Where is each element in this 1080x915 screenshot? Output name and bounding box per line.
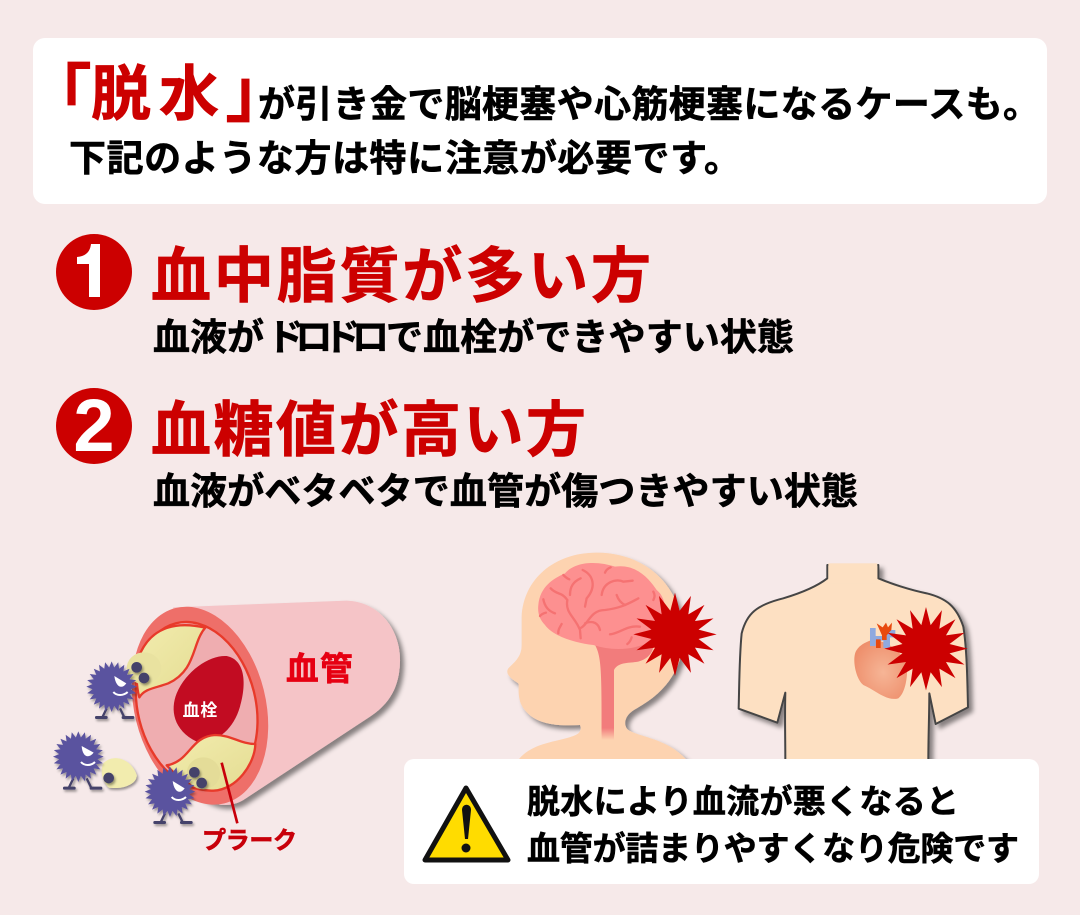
head silhouette	[507, 553, 687, 760]
pointer line	[222, 763, 237, 823]
text: intro line 1: が引き金で脳梗塞や心筋梗塞になるケースも。	[258, 84, 1040, 125]
heart vessels	[870, 623, 895, 648]
brain stem	[595, 640, 654, 740]
label: vessel: 血管	[286, 650, 353, 687]
text: item 2 description: 血液がベタベタで血管が傷つきやすい状態	[153, 471, 858, 512]
vessel wall	[112, 592, 288, 819]
text: item 1 description: で血栓ができやすい状態	[386, 317, 794, 358]
plaque: grabbed lower lump	[187, 757, 220, 789]
heading: dehydration highlight	[24, 55, 293, 135]
panel: warning callout	[404, 759, 1039, 884]
text: intro line 2: 下記のような方は特に注意が必要です。	[69, 138, 741, 179]
germ 3	[145, 766, 207, 824]
heading: dehydration highlight: 」	[225, 55, 293, 131]
illustration: blood vessel with plaque	[53, 592, 400, 854]
icon: number 2 badge: 2	[73, 384, 115, 467]
item 1: high blood lipids	[56, 234, 794, 358]
plaque: upper	[137, 625, 205, 697]
heading: item 2: 血糖値が高い方	[151, 397, 586, 464]
torso	[739, 565, 968, 760]
brain	[538, 563, 665, 649]
burst: brain	[633, 593, 717, 676]
burst: heart	[884, 607, 968, 690]
heart	[854, 640, 907, 699]
neck cover	[828, 563, 877, 583]
plaque: grabbed upper lump	[127, 652, 161, 684]
icon: number 2 badge	[56, 384, 132, 467]
text: item 1 description	[153, 317, 794, 358]
vessel lumen	[119, 609, 275, 803]
text: warning line 1: 脱水により血流が悪くなると	[527, 783, 959, 820]
plaque: detached lump	[102, 758, 137, 788]
vessel body	[153, 601, 400, 805]
label: plaque: プラーク	[202, 827, 297, 854]
icon: number 1 badge	[56, 234, 132, 310]
germ 2	[53, 731, 114, 790]
text: item 1 description: ドロドロ	[267, 317, 389, 358]
plaque: lower	[167, 735, 255, 791]
brain folds	[540, 567, 655, 644]
germ 1	[86, 661, 149, 719]
illustration: head with brain	[507, 553, 717, 760]
heading: dehydration highlight: 脱水	[91, 61, 219, 128]
label: clot: 血栓	[183, 700, 217, 720]
heading: dehydration highlight: 「	[24, 59, 92, 135]
panel: intro message	[24, 38, 1047, 204]
illustration: torso with heart	[739, 563, 968, 760]
icon: warning triangle	[425, 788, 508, 860]
text: item 1 description: 血液が	[153, 317, 264, 358]
heading: item 1: 血中脂質が多い方	[151, 243, 651, 310]
blood clot	[174, 656, 244, 742]
text: warning line 2: 血管が詰まりやすくなり危険です	[527, 830, 1019, 867]
item 2: high blood sugar	[56, 384, 858, 512]
